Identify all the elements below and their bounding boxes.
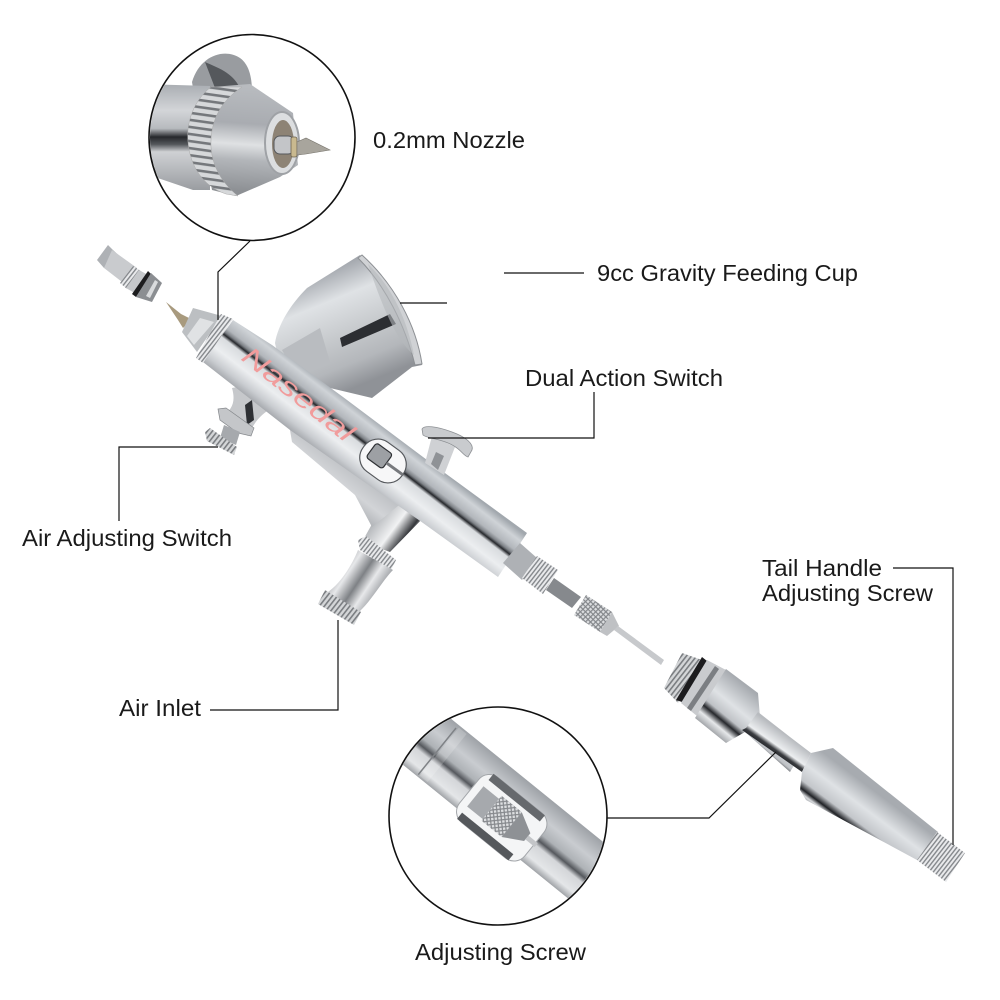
adjusting screw window: [456, 774, 548, 862]
label: dual action switch: Dual Action Switch: [525, 365, 723, 391]
dual action switch: [422, 427, 472, 475]
air adjusting switch: [205, 385, 272, 455]
callout circle: adjusting screw close-up: [388, 706, 608, 926]
label: adjusting screw: Adjusting Screw: [415, 939, 586, 965]
knurled ring: [196, 314, 233, 363]
rear collar and knurl: [503, 543, 581, 608]
nozzle cone: [182, 308, 222, 352]
label: cup: 9cc Gravity Feeding Cup: [597, 260, 858, 286]
leader: cup label: [504, 272, 584, 274]
watermark: Nasedal: [236, 340, 362, 449]
leader: nozzle: [218, 241, 250, 320]
icon: needle tip: [166, 302, 189, 328]
handle: [290, 425, 430, 527]
tail head: [695, 669, 802, 772]
icon: detached nozzle cap: [97, 245, 162, 302]
needle: [614, 626, 664, 665]
tail handle: [664, 653, 965, 882]
label: nozzle: 0.2mm Nozzle: [373, 127, 525, 153]
label: tail handle adjusting screw: [762, 555, 933, 606]
tail neck: [742, 712, 811, 772]
label: air adjusting switch: Air Adjusting Switch: [22, 525, 232, 551]
main barrel: [203, 320, 527, 577]
label: tail handle adjusting screw: Adjusting Screw: [762, 580, 933, 606]
gravity feed cup: [275, 255, 422, 398]
tail knurl: [917, 832, 965, 882]
leader: cup: [400, 302, 447, 304]
threaded end: [664, 653, 705, 703]
label: air inlet: Air Inlet: [119, 695, 202, 721]
callout circle: nozzle close-up: [140, 34, 355, 240]
barrel window: [353, 432, 413, 490]
leader: tail handle: [893, 568, 953, 845]
leader: adjusting screw: [607, 752, 776, 818]
leader: dual action switch: [428, 392, 594, 438]
leader: air inlet: [210, 620, 338, 710]
airbrush body: [182, 255, 664, 665]
needle chuck: [574, 595, 619, 636]
leader: air adjusting switch: [119, 447, 218, 521]
tapered grip: [800, 748, 938, 860]
label: tail handle adjusting screw: Tail Handle: [762, 555, 882, 581]
air inlet fitting: [318, 490, 425, 625]
